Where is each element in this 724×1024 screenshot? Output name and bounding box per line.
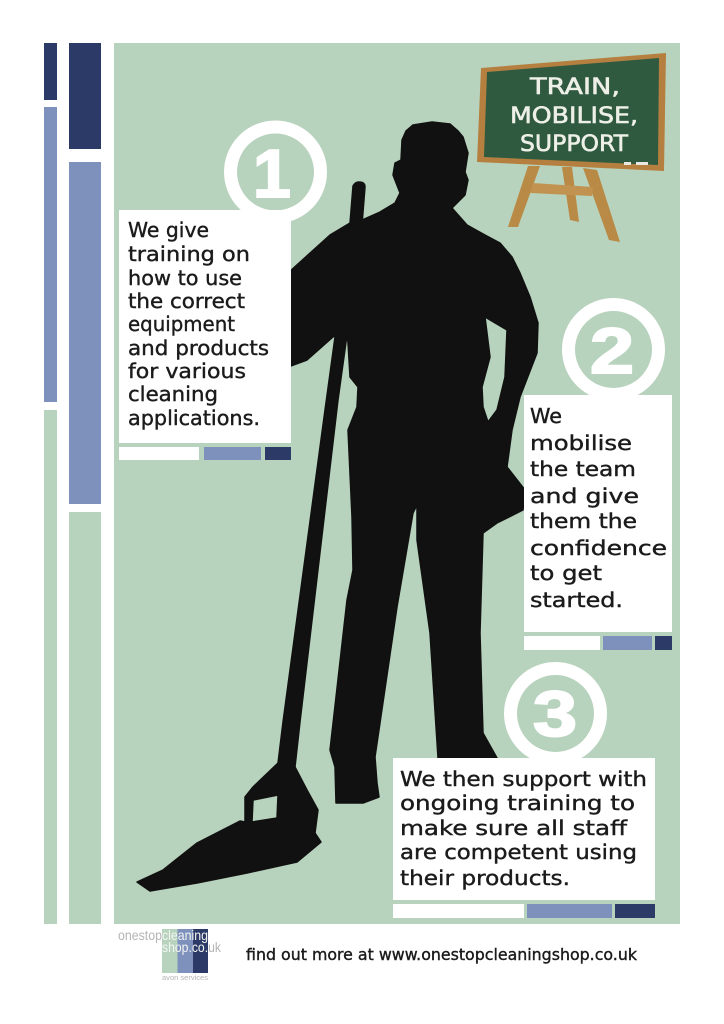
easel legs [508,166,620,242]
step 2 colour strip [524,636,672,650]
step 3 text box [393,758,655,900]
step 1 text box: training on [128,242,250,266]
step 3 number badge: 3 [533,678,577,750]
step 1 text box: and products [128,336,269,360]
step 2 text box: We [530,404,562,428]
step 1 text box: cleaning [128,382,218,406]
logo: avon services [162,973,208,982]
board title: TRAIN, [529,75,620,100]
step 2 text box: and give [530,484,639,508]
step 3 colour strip [393,904,655,918]
mop handle [278,182,365,767]
step 2 number badge [568,304,658,394]
step 3 text box: make sure all staff [400,816,628,840]
step 1 text box: how to use [128,266,242,290]
step 2 text box: the team [530,457,636,481]
step 2 text box: started. [530,588,623,612]
board title: MOBILISE, [510,104,638,129]
step 1 number badge [230,127,320,217]
chalk sticks [624,162,648,165]
step 2 text box: confidence [530,536,667,560]
step 2 number badge: 2 [590,315,634,387]
logo: onestopcleaning [118,927,208,943]
mop head [137,763,321,891]
step 1 colour strip [119,447,291,460]
step 1 text box: We give [128,218,209,242]
main green panel [114,43,680,924]
board surface [484,58,659,165]
board title [510,75,638,157]
step 1 text box: equipment [128,312,235,336]
figure [288,122,538,803]
chalkboard illustration [477,53,666,242]
step 2 text box: to get [530,561,602,585]
step 1 text box: applications. [128,406,260,430]
step 2 text box: mobilise [530,431,632,455]
left colour bars [44,43,101,924]
step 3 text box: We then support with [400,767,647,791]
step 2 text box [524,395,672,632]
footer link text: find out more at www.onestopcleaningshop.co.uk [246,945,638,964]
silhouette: cleaner with mop [137,122,538,891]
board title: SUPPORT [520,132,629,157]
step 2 text box: them the [530,509,637,533]
step 3 text box: their products. [400,866,570,890]
logo: shop.co.uk [162,939,222,955]
step 1 text box: the correct [128,289,245,313]
step 1 text box: for various [128,359,246,383]
step 3 number badge [510,668,600,758]
step 3 text box: are competent using [400,840,637,864]
step 1 number badge: 1 [253,136,291,212]
logo [118,927,222,982]
step 3 text box: ongoing training to [400,791,635,815]
step 1 text box [119,210,291,443]
board frame [477,53,666,171]
